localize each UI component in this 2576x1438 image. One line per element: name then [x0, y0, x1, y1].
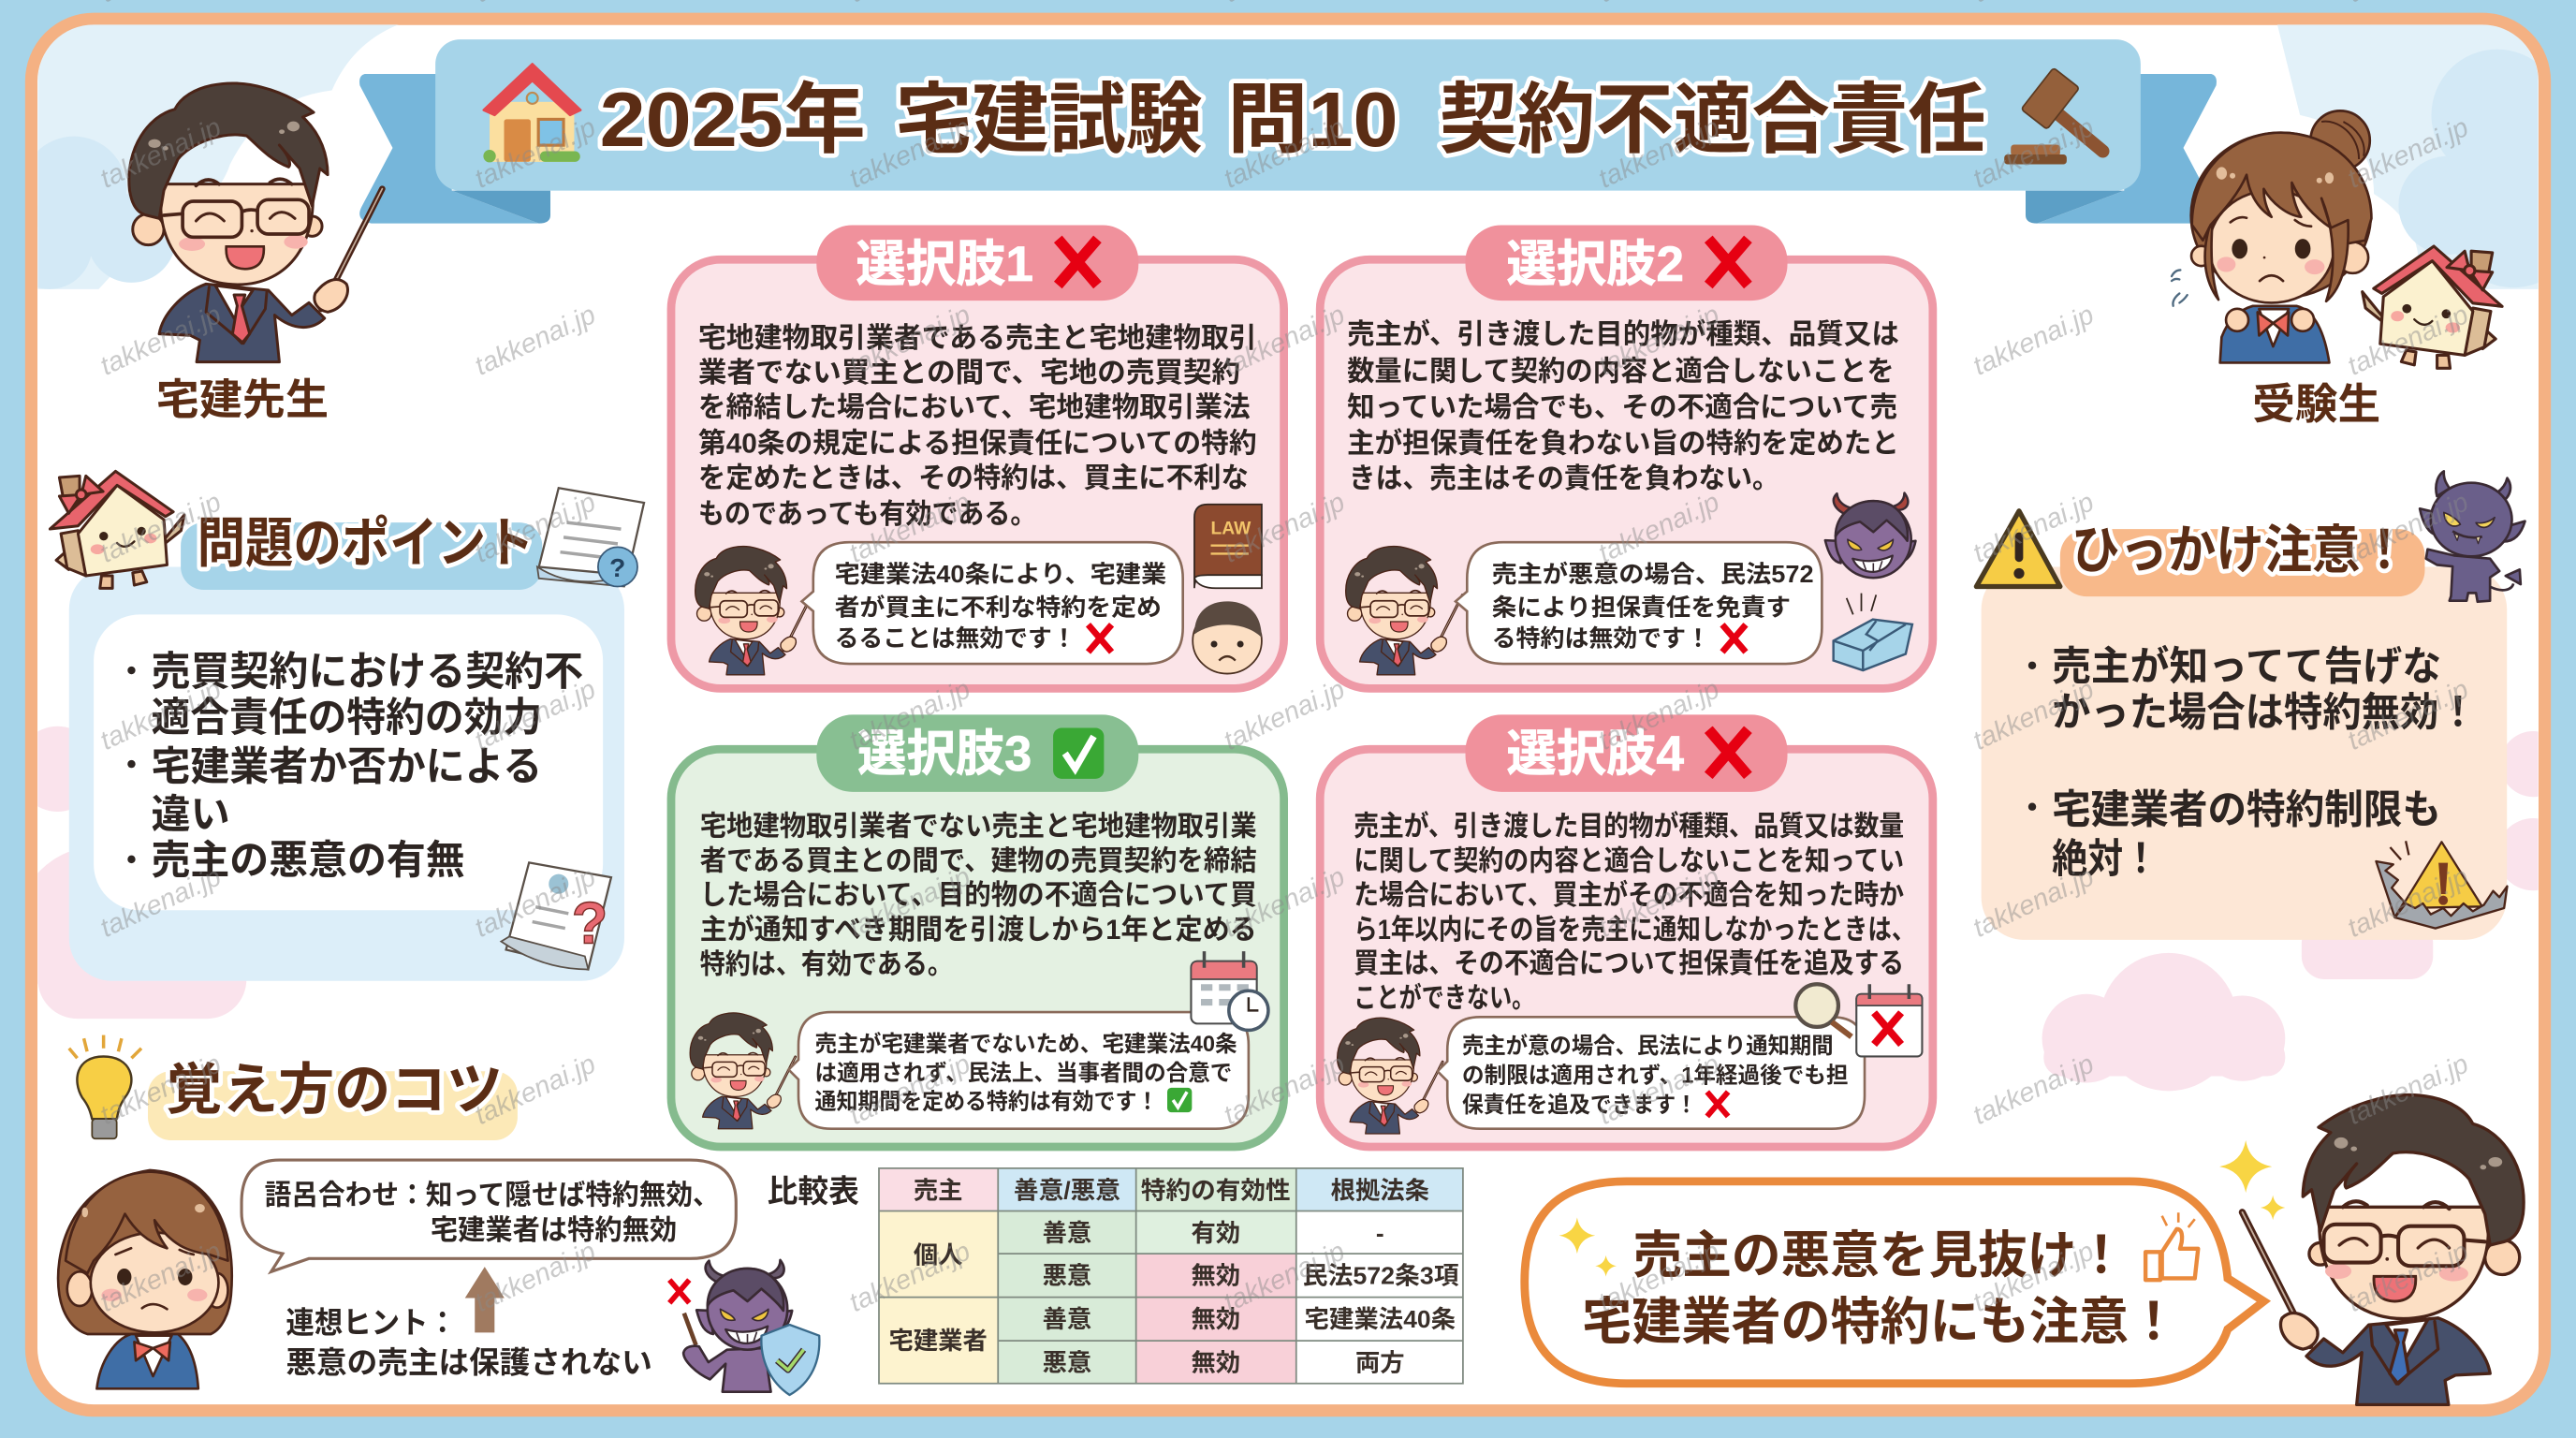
label: student: 受験生 — [2252, 381, 2380, 429]
watermark: takkenai.jp — [470, 1237, 600, 1318]
watermark: takkenai.jp — [1594, 674, 1724, 756]
question text — [698, 323, 1257, 530]
character: teacher small — [1346, 547, 1462, 675]
explanation bubble: る特約は無効です！ — [1492, 625, 1710, 653]
choice header pill: 選択肢4 — [1506, 726, 1684, 782]
warning list — [2028, 645, 2478, 882]
watermark: takkenai.jp — [1594, 861, 1724, 944]
closing message: 宅建業者の特約にも注意！ — [1582, 1293, 2178, 1350]
explanation bubble: 宅建業法40条により、宅建業 — [835, 561, 1166, 588]
table cell fills — [879, 1168, 1463, 1384]
heading pill — [2060, 529, 2424, 596]
watermark: takkenai.jp — [1594, 300, 1724, 382]
table text: 宅建業者 — [889, 1327, 988, 1355]
choice header pill — [816, 714, 1138, 792]
table text: - — [1376, 1219, 1384, 1247]
explanation bubble: るることは無効です！ — [835, 625, 1076, 653]
card — [671, 259, 1284, 688]
bullet list: 適合責任の特約の効力 — [152, 696, 542, 741]
table grid — [879, 1168, 1463, 1384]
watermark: takkenai.jp — [1220, 112, 1350, 195]
panel: trap warning — [1976, 471, 2525, 940]
explanation bubble — [788, 1012, 1249, 1129]
character: house mascot — [2363, 246, 2502, 368]
watermark: takkenai.jp — [95, 1049, 226, 1131]
character: student — [58, 1170, 232, 1388]
table text: 売主 — [914, 1176, 962, 1204]
table text: 悪意 — [1043, 1262, 1091, 1290]
icon: document with question mark — [501, 862, 611, 969]
watermark: takkenai.jp — [1594, 1049, 1724, 1131]
explanation bubble: 通知期間を定める特約は有効です！ — [815, 1090, 1158, 1115]
icon: calendar with clock — [1191, 951, 1268, 1030]
question text: 第40条の規定による担保責任についての特約 — [698, 429, 1257, 460]
watermark: takkenai.jp — [1594, 112, 1724, 195]
watermark: takkenai.jp — [95, 112, 226, 195]
table text: 根拠法条 — [1331, 1176, 1429, 1204]
watermark: takkenai.jp — [95, 300, 226, 382]
icon: scroll with question: ? — [609, 553, 625, 582]
watermark: takkenai.jp — [95, 674, 226, 756]
speech bubble: 宅建業者は特約無効 — [431, 1215, 677, 1246]
choice header pill: 選択肢1 — [856, 237, 1033, 292]
watermark: takkenai.jp — [2343, 112, 2473, 195]
explanation bubble: 売主が宅建業者でないため、宅建業法40条 — [815, 1031, 1237, 1057]
icon: magnifier — [1795, 984, 1852, 1036]
speech bubble: 語呂合わせ：知って隠せば特約無効、 — [265, 1180, 720, 1211]
character: devil with shield — [683, 1260, 819, 1395]
title text: 2025年 — [600, 77, 866, 163]
explanation bubble — [1456, 542, 1822, 664]
character: devil — [2420, 471, 2525, 602]
heading pill — [181, 522, 542, 590]
watermark: takkenai.jp — [1969, 1049, 2099, 1131]
choice header pill: 選択肢3 — [857, 726, 1032, 782]
explanation bubble: 売主が悪意の場合、民法572 — [1492, 560, 1814, 588]
icon: house — [483, 64, 580, 162]
ribbon left — [359, 74, 539, 224]
title text: 宅建試験 — [896, 77, 1203, 163]
title text: 契約不適合責任 — [1439, 77, 1986, 163]
watermark: takkenai.jp — [470, 861, 600, 944]
icon: calendar with cross — [1856, 984, 1922, 1056]
watermark: takkenai.jp — [1969, 674, 2099, 756]
table text: 民法572条3項 — [1303, 1262, 1459, 1290]
watermark: takkenai.jp — [95, 1237, 226, 1318]
question text: 知っていた場合でも、その不適合について売 — [1347, 392, 1897, 423]
comparison table — [879, 1168, 1463, 1384]
panel background — [1982, 566, 2507, 940]
watermark: takkenai.jp — [845, 487, 975, 569]
panel: choice 2 — [1320, 225, 1933, 688]
panel background — [69, 566, 624, 981]
explanation bubble: 保責任を追及できます！ — [1462, 1093, 1697, 1118]
icon: cracked box — [1834, 594, 1912, 670]
watermark: takkenai.jp — [1594, 1237, 1724, 1318]
choice header pill — [1466, 225, 1788, 301]
watermark: takkenai.jp — [1220, 300, 1350, 382]
character: teacher small — [690, 1013, 796, 1129]
bullet list: 売主の悪意の有無 — [152, 839, 465, 884]
table text: 有効 — [1191, 1219, 1240, 1247]
table text: 悪意 — [1043, 1349, 1091, 1377]
bullet list: 売買契約における契約不 — [152, 650, 583, 695]
warning list: 売主が知ってて告げな — [2052, 645, 2441, 690]
table text: 善意 — [1043, 1219, 1091, 1247]
watermark: takkenai.jp — [95, 487, 226, 569]
icon: red cross — [669, 1280, 689, 1303]
icon: house mascot — [50, 471, 184, 588]
sparkles near teacher — [2219, 1140, 2285, 1220]
heading: ひっかけ注意！ — [2071, 521, 2408, 580]
heading: 問題のポイント — [198, 514, 534, 574]
explanation bubble: 者が買主に不利な特約を定め — [835, 593, 1162, 621]
sparkles — [1559, 1217, 1617, 1277]
icon: bear trap with warning — [2376, 841, 2507, 929]
watermark: takkenai.jp — [845, 1237, 975, 1318]
question text — [1347, 318, 1899, 494]
icon: law book: LAW — [1211, 519, 1251, 538]
section: memory tips — [58, 1035, 819, 1395]
table text — [889, 1176, 1459, 1377]
title text — [600, 77, 1986, 163]
watermark: takkenai.jp — [1969, 112, 2099, 195]
table text: 宅建業法40条 — [1305, 1305, 1456, 1333]
background clouds — [7, 23, 2576, 1091]
arrow — [465, 1267, 505, 1332]
icon: document with question mark: ? — [572, 890, 607, 956]
watermark: takkenai.jp — [95, 861, 226, 944]
icon: worried boy — [1193, 601, 1262, 674]
bullet list: 宅建業者か否かによる — [152, 745, 542, 790]
character: teacher large — [2242, 1095, 2524, 1404]
question text: 売主が、引き渡した目的物が種類、品質又は数量 — [1354, 810, 1904, 842]
title text: 問10 — [1227, 77, 1398, 163]
character: student — [2172, 110, 2371, 362]
watermark: takkenai.jp — [1220, 861, 1350, 944]
heading pill — [148, 1071, 518, 1140]
question text: を締結した場合において、宅地建物取引業法 — [698, 392, 1251, 423]
icon: law book — [1194, 505, 1262, 588]
watermark: takkenai.jp — [845, 861, 975, 944]
explanation bubble — [1438, 1017, 1865, 1129]
table text: 無効 — [1191, 1305, 1240, 1333]
question text: 者である買主との間で、建物の売買契約を締結 — [700, 845, 1257, 876]
panel: choice 3 — [671, 714, 1284, 1147]
watermark: takkenai.jp — [1969, 487, 2099, 569]
closing message — [1582, 1226, 2178, 1350]
watermark: takkenai.jp — [845, 1049, 975, 1131]
character: teacher small — [1338, 1018, 1442, 1134]
association hint — [285, 1306, 652, 1379]
explanation bubble: の制限は適用されず、1年経過後でも担 — [1462, 1064, 1849, 1089]
watermark: takkenai.jp — [470, 1049, 600, 1131]
question text: 宅地建物取引業者である売主と宅地建物取引 — [698, 323, 1257, 354]
watermark: takkenai.jp — [2343, 861, 2473, 944]
watermark: takkenai.jp — [1969, 300, 2099, 382]
question text: ら1年以内にその旨を売主に通知しなかったときは、 — [1354, 915, 1915, 946]
panel: choice 4 — [1320, 714, 1933, 1147]
explanation bubble — [802, 542, 1183, 664]
question text: 特約は、有効である。 — [700, 949, 953, 980]
question text: した場合において、目的物の不適合について買 — [700, 880, 1257, 911]
question text: 主が通知すべき期間を引渡しから1年と定める — [700, 914, 1257, 946]
table text: 善意/悪意 — [1014, 1176, 1120, 1204]
ribbon right — [2037, 74, 2217, 224]
warning list: かった場合は特約無効！ — [2052, 691, 2478, 736]
character: teacher small — [695, 547, 812, 675]
question text: ことができない。 — [1354, 982, 1534, 1014]
table text: 個人 — [914, 1241, 962, 1269]
icon: light bulb — [69, 1035, 141, 1138]
panel: problem points — [50, 471, 644, 981]
watermark: takkenai.jp — [845, 112, 975, 195]
table text: 無効 — [1191, 1262, 1240, 1290]
comparison table title: 比較表 — [768, 1175, 859, 1210]
label: teacher: 宅建先生 — [156, 375, 329, 423]
question text: 宅地建物取引業者でない売主と宅地建物取引業 — [700, 811, 1257, 842]
watermark: takkenai.jp — [470, 112, 600, 195]
bullet list: 違い — [152, 793, 230, 838]
question text: 業者でない買主との間で、宅地の売買契約 — [698, 358, 1240, 389]
question text: 主が担保責任を負わない旨の特約を定めたと — [1347, 428, 1899, 460]
association hint: 連想ヒント： — [285, 1306, 457, 1340]
panel: choice 1 — [671, 225, 1284, 688]
table text: 無効 — [1191, 1349, 1240, 1377]
white inner card — [94, 614, 603, 910]
ribbon right fold — [2026, 191, 2124, 224]
question text: に関して契約の内容と適合しないことを知ってい — [1354, 845, 1904, 876]
icon: thumbs up — [2145, 1212, 2198, 1280]
question text: ものであっても有効である。 — [698, 499, 1036, 530]
watermark: takkenai.jp — [1594, 487, 1724, 569]
watermark: takkenai.jp — [845, 674, 975, 756]
question text: 売主が、引き渡した目的物が種類、品質又は — [1347, 318, 1899, 350]
warning list: 絶対！ — [2052, 837, 2159, 882]
icon: scroll with question — [537, 488, 644, 587]
choice header pill — [1466, 714, 1788, 792]
watermark: takkenai.jp — [1220, 1237, 1350, 1318]
watermark: takkenai.jp — [2343, 300, 2473, 382]
heading: 覚え方のコツ — [166, 1059, 503, 1122]
question text: 数量に関して契約の内容と適合しないことを — [1347, 356, 1895, 387]
watermark: takkenai.jp — [845, 300, 975, 382]
character: teacher — [129, 83, 382, 362]
closing message: 売主の悪意を見抜け！ — [1633, 1226, 2126, 1284]
watermark: takkenai.jp — [2343, 1237, 2473, 1318]
title banner — [359, 39, 2217, 224]
question text: きは、売主はその責任を負わない。 — [1349, 463, 1779, 494]
explanation bubble: 条により担保責任を免責す — [1492, 594, 1791, 621]
watermark: takkenai.jp — [2343, 674, 2473, 756]
watermark: takkenai.jp — [1220, 674, 1350, 756]
watermark: takkenai.jp — [1220, 1049, 1350, 1131]
question text: た場合において、買主がその不適合を知った時か — [1354, 879, 1904, 911]
question text — [700, 811, 1257, 980]
icon: warning triangle — [1976, 511, 2060, 587]
icon: devil head — [1825, 493, 1915, 578]
ribbon left fold — [452, 191, 550, 224]
watermark: takkenai.jp — [1969, 861, 2099, 944]
bubble shape — [1525, 1181, 2263, 1384]
choice header pill — [816, 225, 1138, 301]
choice header pill: 選択肢2 — [1506, 237, 1684, 292]
closing speech bubble — [1525, 1181, 2263, 1384]
warning list: 宅建業者の特約制限も — [2052, 787, 2441, 832]
question text: を定めたときは、その特約は、買主に不利な — [698, 462, 1249, 493]
watermark: takkenai.jp — [470, 487, 600, 569]
table text: 両方 — [1355, 1349, 1405, 1377]
speech bubble — [242, 1160, 736, 1271]
question text: 買主は、その不適合について担保責任を追及する — [1354, 948, 1904, 979]
watermark: takkenai.jp — [2343, 1049, 2473, 1131]
association hint: 悪意の売主は保護されない — [285, 1345, 652, 1379]
explanation bubble: は適用されず、民法上、当事者間の合意で — [815, 1061, 1232, 1086]
watermark: takkenai.jp — [2343, 487, 2473, 569]
bullet list — [127, 650, 583, 884]
watermark: takkenai.jp — [470, 674, 600, 756]
card — [1320, 749, 1933, 1147]
watermark: takkenai.jp — [470, 300, 600, 382]
icon: gavel — [2004, 67, 2102, 165]
explanation bubble: 売主が意の場合、民法により通知期間 — [1462, 1033, 1834, 1059]
card — [671, 749, 1284, 1147]
card — [1320, 259, 1933, 688]
table text: 善意 — [1043, 1305, 1091, 1333]
table text: 特約の有効性 — [1141, 1176, 1291, 1204]
banner plate — [435, 39, 2141, 191]
watermark: takkenai.jp — [1220, 487, 1350, 569]
watermark: takkenai.jp — [1969, 1237, 2099, 1318]
question text — [1354, 810, 1915, 1014]
